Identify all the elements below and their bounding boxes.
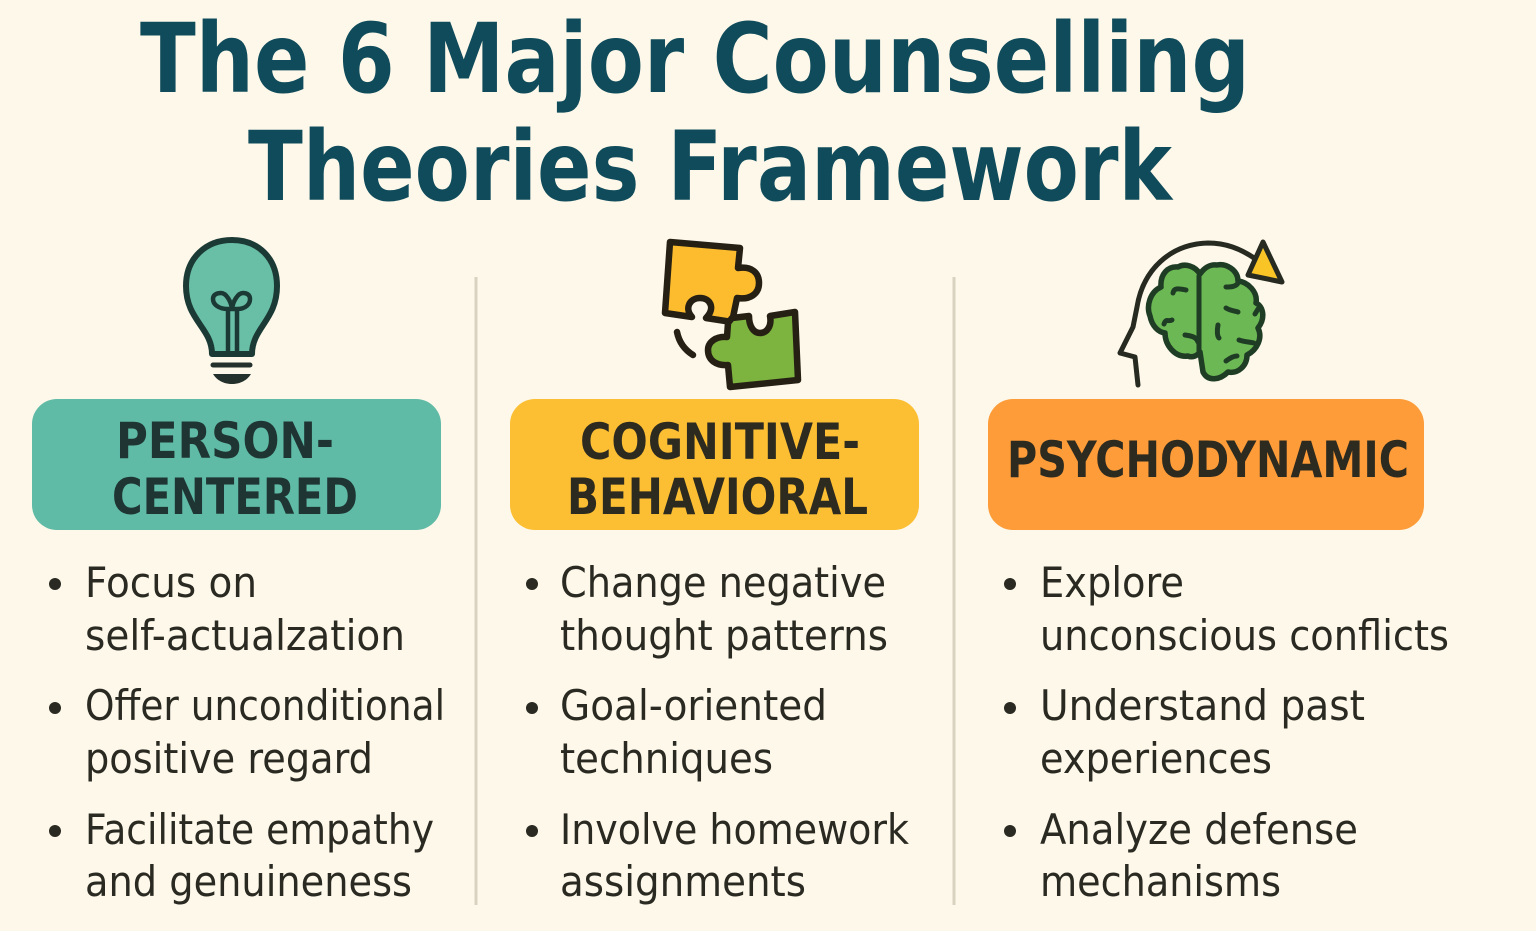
bullet list: person-centered: and genuineness bbox=[85, 857, 412, 906]
bullet list: cognitive-behavioral: Change negative bbox=[560, 558, 886, 607]
bullet list: cognitive-behavioral bbox=[526, 558, 910, 906]
panel: cognitive-behavioral bbox=[510, 242, 919, 906]
bullet list: psychodynamic: experiences bbox=[1040, 734, 1272, 783]
icon: head with brain and arrow bbox=[1120, 242, 1282, 385]
header: person-centered: PERSON- bbox=[116, 412, 334, 470]
bullet list: psychodynamic: Understand past bbox=[1040, 681, 1365, 730]
bullet list: psychodynamic: Explore bbox=[1040, 558, 1184, 607]
bullet list: cognitive-behavioral: Involve homework bbox=[560, 805, 910, 854]
bullet list: person-centered bbox=[49, 558, 445, 906]
bullet list: cognitive-behavioral: techniques bbox=[560, 734, 773, 783]
bullet list: psychodynamic: Analyze defense bbox=[1040, 805, 1358, 854]
header: psychodynamic bbox=[988, 399, 1424, 530]
header: cognitive-behavioral: COGNITIVE- bbox=[580, 413, 860, 471]
bullet list: psychodynamic: mechanisms bbox=[1040, 857, 1281, 906]
panel: psychodynamic bbox=[988, 242, 1449, 906]
bullet list: cognitive-behavioral: Goal-oriented bbox=[560, 681, 827, 730]
bullet list: person-centered: Offer unconditional bbox=[85, 681, 445, 730]
bullet list: cognitive-behavioral: thought patterns bbox=[560, 611, 888, 660]
header: person-centered: CENTERED bbox=[112, 468, 358, 526]
header: person-centered bbox=[32, 399, 441, 530]
bullet list: cognitive-behavioral: assignments bbox=[560, 857, 806, 906]
bullet list: person-centered: Focus on bbox=[85, 558, 257, 607]
bullet list: psychodynamic bbox=[1004, 558, 1449, 906]
header: cognitive-behavioral: BEHAVIORAL bbox=[567, 468, 868, 526]
icon: light bulb bbox=[186, 240, 277, 384]
panel: person-centered bbox=[32, 240, 445, 906]
title bbox=[140, 3, 1250, 223]
bullet list: person-centered: self-actualzation bbox=[85, 611, 405, 660]
header: cognitive-behavioral bbox=[510, 399, 919, 530]
header: psychodynamic: PSYCHODYNAMIC bbox=[1007, 431, 1409, 489]
bullet list: psychodynamic: unconscious conflicts bbox=[1040, 611, 1449, 660]
title: The 6 Major Counselling bbox=[140, 3, 1250, 115]
title: Theories Framework bbox=[248, 111, 1174, 223]
bullet list: person-centered: Facilitate empathy bbox=[85, 805, 434, 854]
bullet list: person-centered: positive regard bbox=[85, 734, 373, 783]
icon: puzzle pieces bbox=[665, 242, 798, 387]
